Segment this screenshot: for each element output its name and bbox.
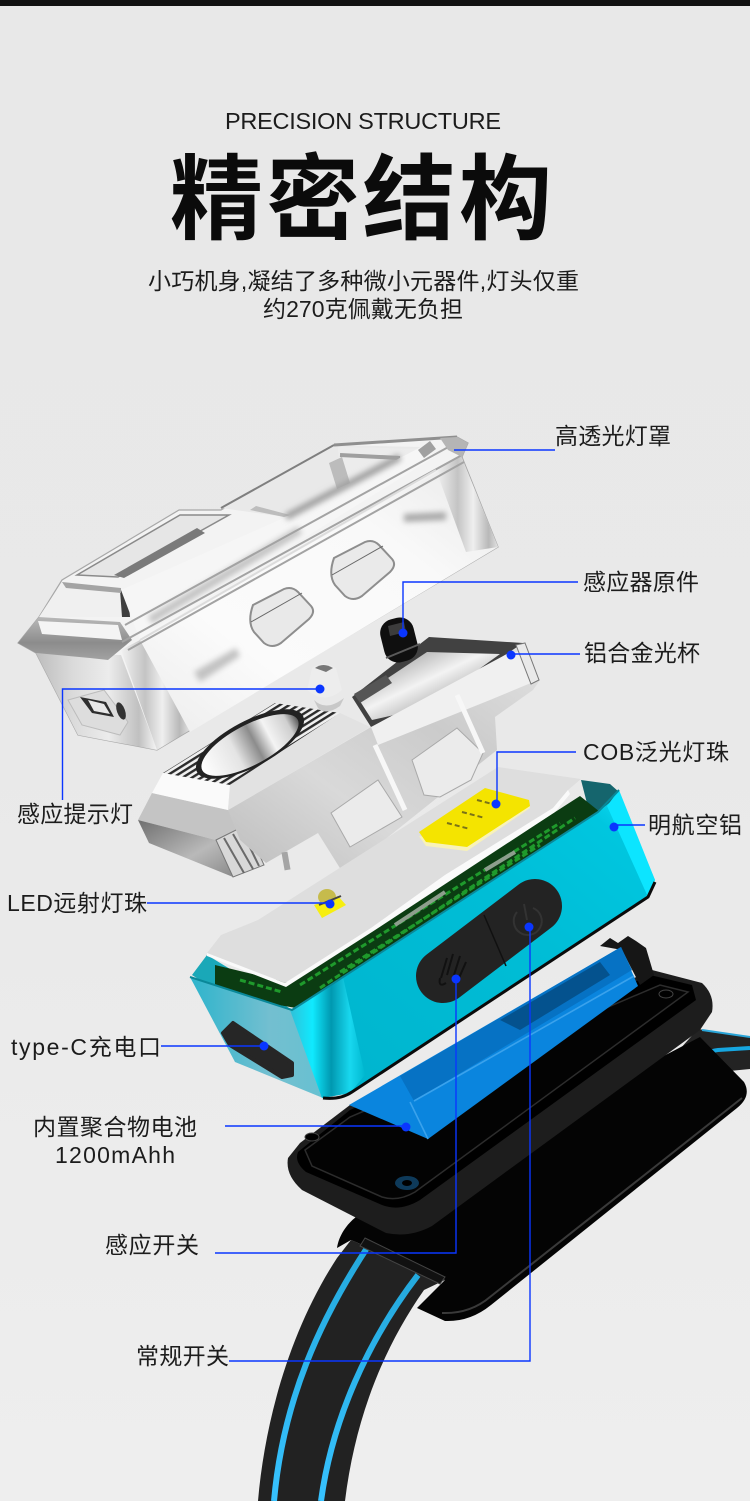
COB yellow chip: [419, 788, 530, 851]
side block: [228, 713, 370, 810]
heat sink top with fins: [163, 703, 340, 787]
strap slot: [360, 1238, 445, 1284]
description text: [148, 268, 579, 322]
callout labels: 感应器原件: [583, 569, 699, 595]
left side face: [190, 977, 323, 1098]
corner highlight: [290, 977, 365, 1098]
left end face: [36, 653, 157, 750]
callout labels: 铝合金光杯: [584, 640, 700, 666]
main title: 精密结构: [170, 148, 552, 252]
sensing indicator dome: [307, 664, 344, 712]
blurred logo smudges: [194, 512, 446, 682]
callout labels: 高透光灯罩: [555, 423, 671, 449]
lid ridge: [121, 447, 436, 640]
lid top surface right: [221, 445, 421, 517]
reflector bowl: [193, 702, 307, 788]
type-c port pill: [223, 1023, 292, 1077]
rear clip teeth: [600, 936, 654, 985]
top black bar: [0, 0, 750, 6]
callout labels: LED远射灯珠: [7, 890, 147, 916]
lid top surface left: [77, 515, 229, 577]
transparent lamp cover: [18, 437, 498, 750]
aluminium cup interior: [358, 652, 500, 720]
plate ribs: [375, 695, 483, 810]
heading block: [148, 108, 579, 322]
main plate: [228, 643, 540, 873]
sensor cup dark frame: [352, 637, 523, 727]
callout labels: type-C充电口: [11, 1034, 161, 1060]
ring around reflector: [186, 696, 314, 792]
plate window right: [412, 728, 483, 797]
upper white ledge: [371, 650, 538, 745]
blue polymer battery: [349, 947, 638, 1139]
strap: head band with blue stripes: [258, 1029, 750, 1501]
white front lip: [152, 773, 230, 810]
callout labels: 常规开关: [136, 1343, 229, 1369]
touch switch pill: [440, 904, 542, 985]
callout labels: 1200mAhh: [55, 1142, 175, 1168]
aluminium base plate: [207, 767, 581, 983]
lower black shell: [288, 970, 713, 1234]
aluminium reflector housing: [138, 615, 540, 877]
top lip: [190, 790, 619, 1010]
plate strips: [395, 852, 515, 925]
left corner band: [121, 640, 190, 750]
callout lines and dots: [62, 450, 645, 1361]
plate edge highlight: [442, 1098, 742, 1313]
lid slope left: [39, 582, 129, 617]
plate window left: [331, 780, 402, 847]
description text: 小巧机身,凝结了多种微小元器件,灯头仅重: [148, 268, 579, 294]
cyan aluminium housing: [190, 767, 655, 1098]
english subtitle: PRECISION STRUCTURE: [225, 108, 501, 134]
callout labels: 感应开关: [105, 1232, 199, 1258]
flange lip: [18, 617, 132, 660]
rim lines: [122, 445, 464, 650]
callout dots: [260, 628, 618, 1132]
description text: 约270克佩戴无负担: [263, 296, 463, 322]
right edge highlight: [607, 790, 655, 897]
callout labels: 明航空铝: [648, 812, 742, 838]
window hole right: [331, 541, 394, 599]
pin: [281, 852, 291, 870]
icon: power: [514, 904, 542, 935]
callout labels: 内置聚合物电池: [33, 1114, 197, 1140]
window hole left: [250, 588, 313, 646]
bottom black edge: [323, 882, 655, 1098]
band under front lip: [138, 793, 250, 850]
cover body: [18, 437, 498, 750]
right corner band: [436, 456, 498, 552]
rear rim: [581, 780, 619, 815]
top right tab: [418, 441, 436, 458]
callout labels: [7, 423, 742, 1369]
right ear: [516, 643, 539, 684]
sensor knob: [377, 615, 421, 665]
lower box left: [138, 820, 233, 877]
front face: [295, 795, 655, 1098]
pcb circuit board: [215, 796, 600, 1008]
usb port on cover: [68, 690, 128, 735]
LED long-range bead: [314, 889, 346, 918]
front face: [140, 458, 498, 732]
callout labels: 感应提示灯: [17, 801, 133, 827]
icon: hand: [440, 954, 466, 985]
callout labels: COB泛光灯珠: [583, 739, 729, 765]
strap mounting plate: [337, 1037, 747, 1321]
ribbed corner: [216, 825, 264, 877]
